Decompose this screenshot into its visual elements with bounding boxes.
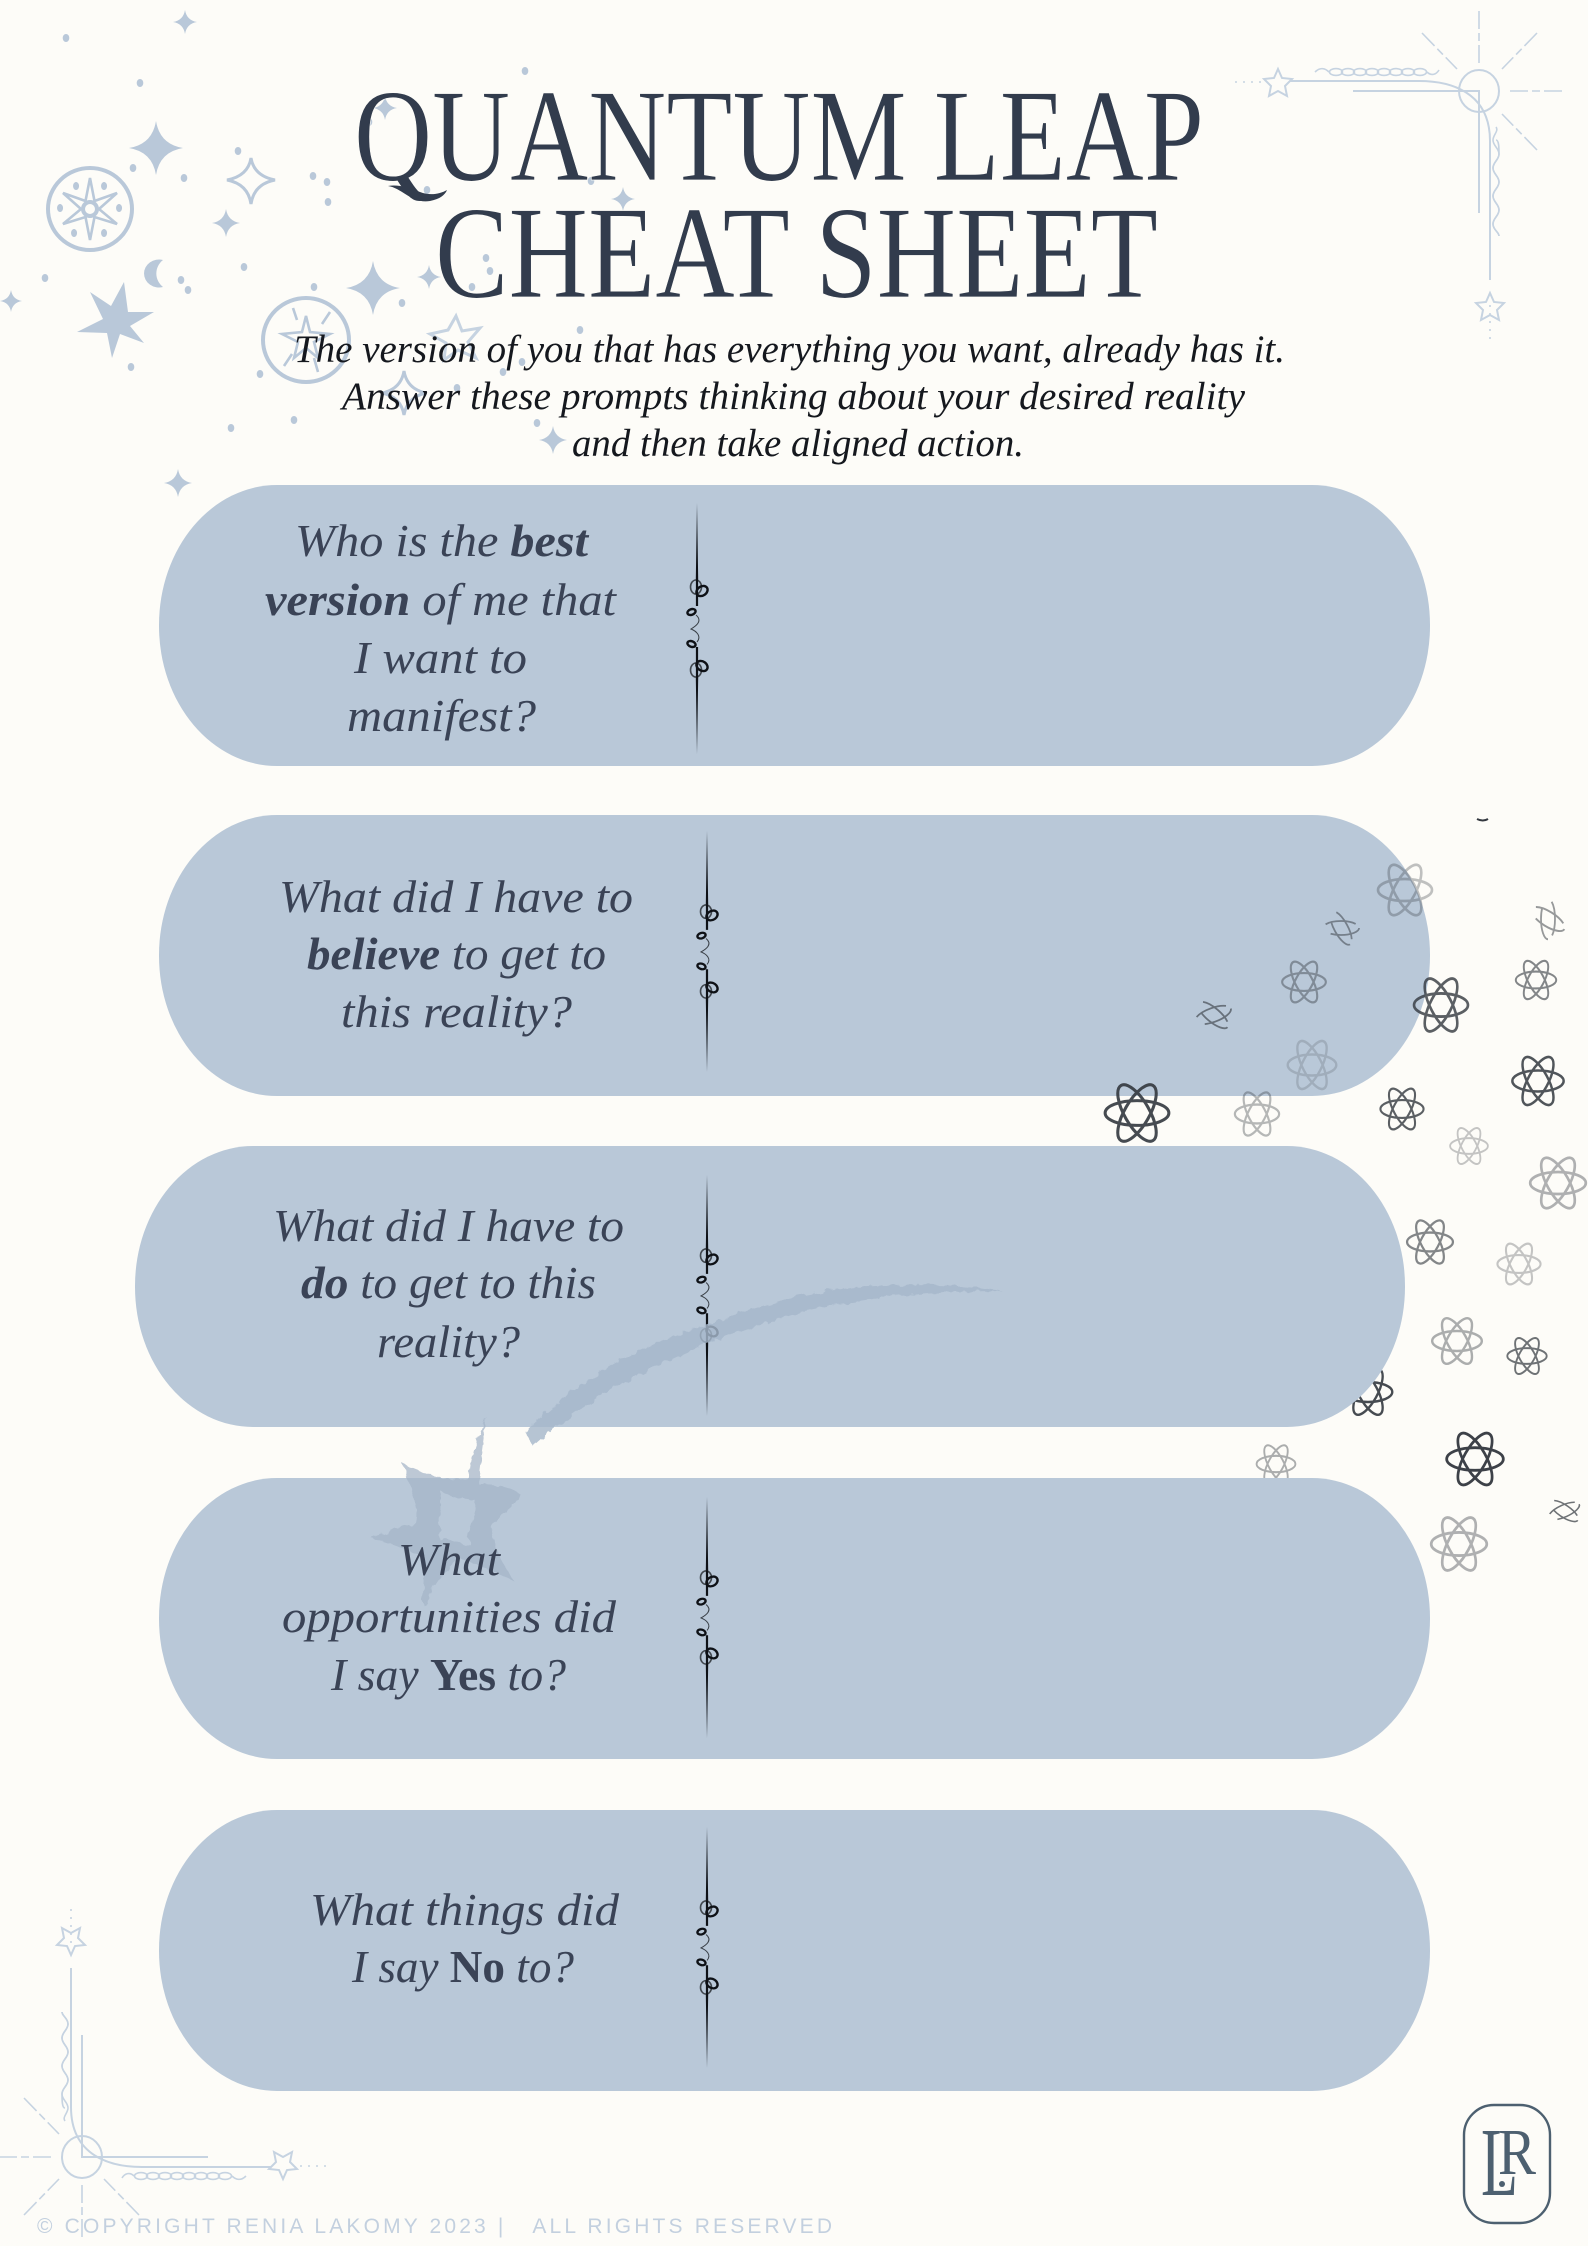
corner ornament: top right xyxy=(1235,11,1562,341)
icon: crescent moon xyxy=(144,260,163,288)
subtitle xyxy=(294,328,1285,465)
star xyxy=(371,1416,520,1605)
prompt 5 text: What things did xyxy=(310,1884,620,1935)
prompt 2 text: What did I have to xyxy=(279,871,633,922)
prompt 5 text: I say No to? xyxy=(351,1941,574,1992)
decorative sparkle cluster xyxy=(0,10,635,497)
subtitle: Answer these prompts thinking about your desired reality xyxy=(339,375,1246,418)
divider 3 xyxy=(697,1175,720,1416)
dots xyxy=(42,34,594,432)
prompt 3 text: do to get to this xyxy=(301,1257,596,1308)
prompt 1 text xyxy=(265,515,617,741)
prompt 5 text xyxy=(310,1884,620,1992)
prompt 2 text xyxy=(279,871,633,1037)
prompt 2 text: believe to get to xyxy=(307,928,606,979)
prompt 1 text: version of me that xyxy=(265,574,617,625)
prompt 4 text: opportunities did xyxy=(282,1591,617,1642)
divider 4 xyxy=(697,1497,720,1738)
prompt 3 text: reality? xyxy=(377,1316,520,1367)
corner ornament: bottom left xyxy=(0,1907,326,2237)
panel: prompt 1 xyxy=(159,485,1430,766)
logo: LR monogram xyxy=(1464,2105,1550,2223)
logo: LR monogram: R xyxy=(1498,2116,1536,2189)
divider 5 xyxy=(697,1827,720,2068)
prompt 3 text: What did I have to xyxy=(273,1200,624,1251)
prompt 4 text: What xyxy=(398,1534,501,1585)
icon: scattered atoms xyxy=(1105,819,1587,1575)
brush star with trail xyxy=(371,1285,1003,1605)
divider 2 xyxy=(697,831,720,1072)
panel: prompt 5 xyxy=(159,1810,1430,2091)
panel: prompt 3 xyxy=(135,1146,1405,1427)
prompt 2 text: this reality? xyxy=(341,986,572,1037)
prompt 3 text xyxy=(273,1200,624,1367)
icon: medallion rays xyxy=(263,298,349,382)
star trail xyxy=(525,1285,1003,1446)
icon: outline star xyxy=(430,316,480,360)
subtitle: The version of you that has everything you want, already has it. xyxy=(294,328,1285,371)
copyright footer: © COPYRIGHT RENIA LAKOMY 2023 | ALL RIGHTS RESERVED xyxy=(37,2215,832,2238)
title: QUANTUM LEAP xyxy=(354,62,1204,209)
title xyxy=(354,62,1204,326)
subtitle: and then take aligned action. xyxy=(572,422,1024,465)
prompt 1 text: manifest? xyxy=(347,690,536,741)
panel: prompt 4 xyxy=(159,1478,1430,1759)
title: CHEAT SHEET xyxy=(435,179,1158,326)
prompt 1 text: Who is the best xyxy=(295,515,589,566)
icon: medallion star xyxy=(48,168,132,250)
prompt 4 text: I say Yes to? xyxy=(330,1649,566,1700)
icon: four-point stars xyxy=(0,10,635,497)
prompt 1 text: I want to xyxy=(353,632,527,683)
panel: prompt 2 xyxy=(159,815,1430,1096)
prompt 4 text xyxy=(282,1534,617,1700)
divider 1 xyxy=(687,503,710,754)
icon: six-point star xyxy=(77,282,154,358)
logo: LR monogram: L xyxy=(1481,2109,1518,2217)
